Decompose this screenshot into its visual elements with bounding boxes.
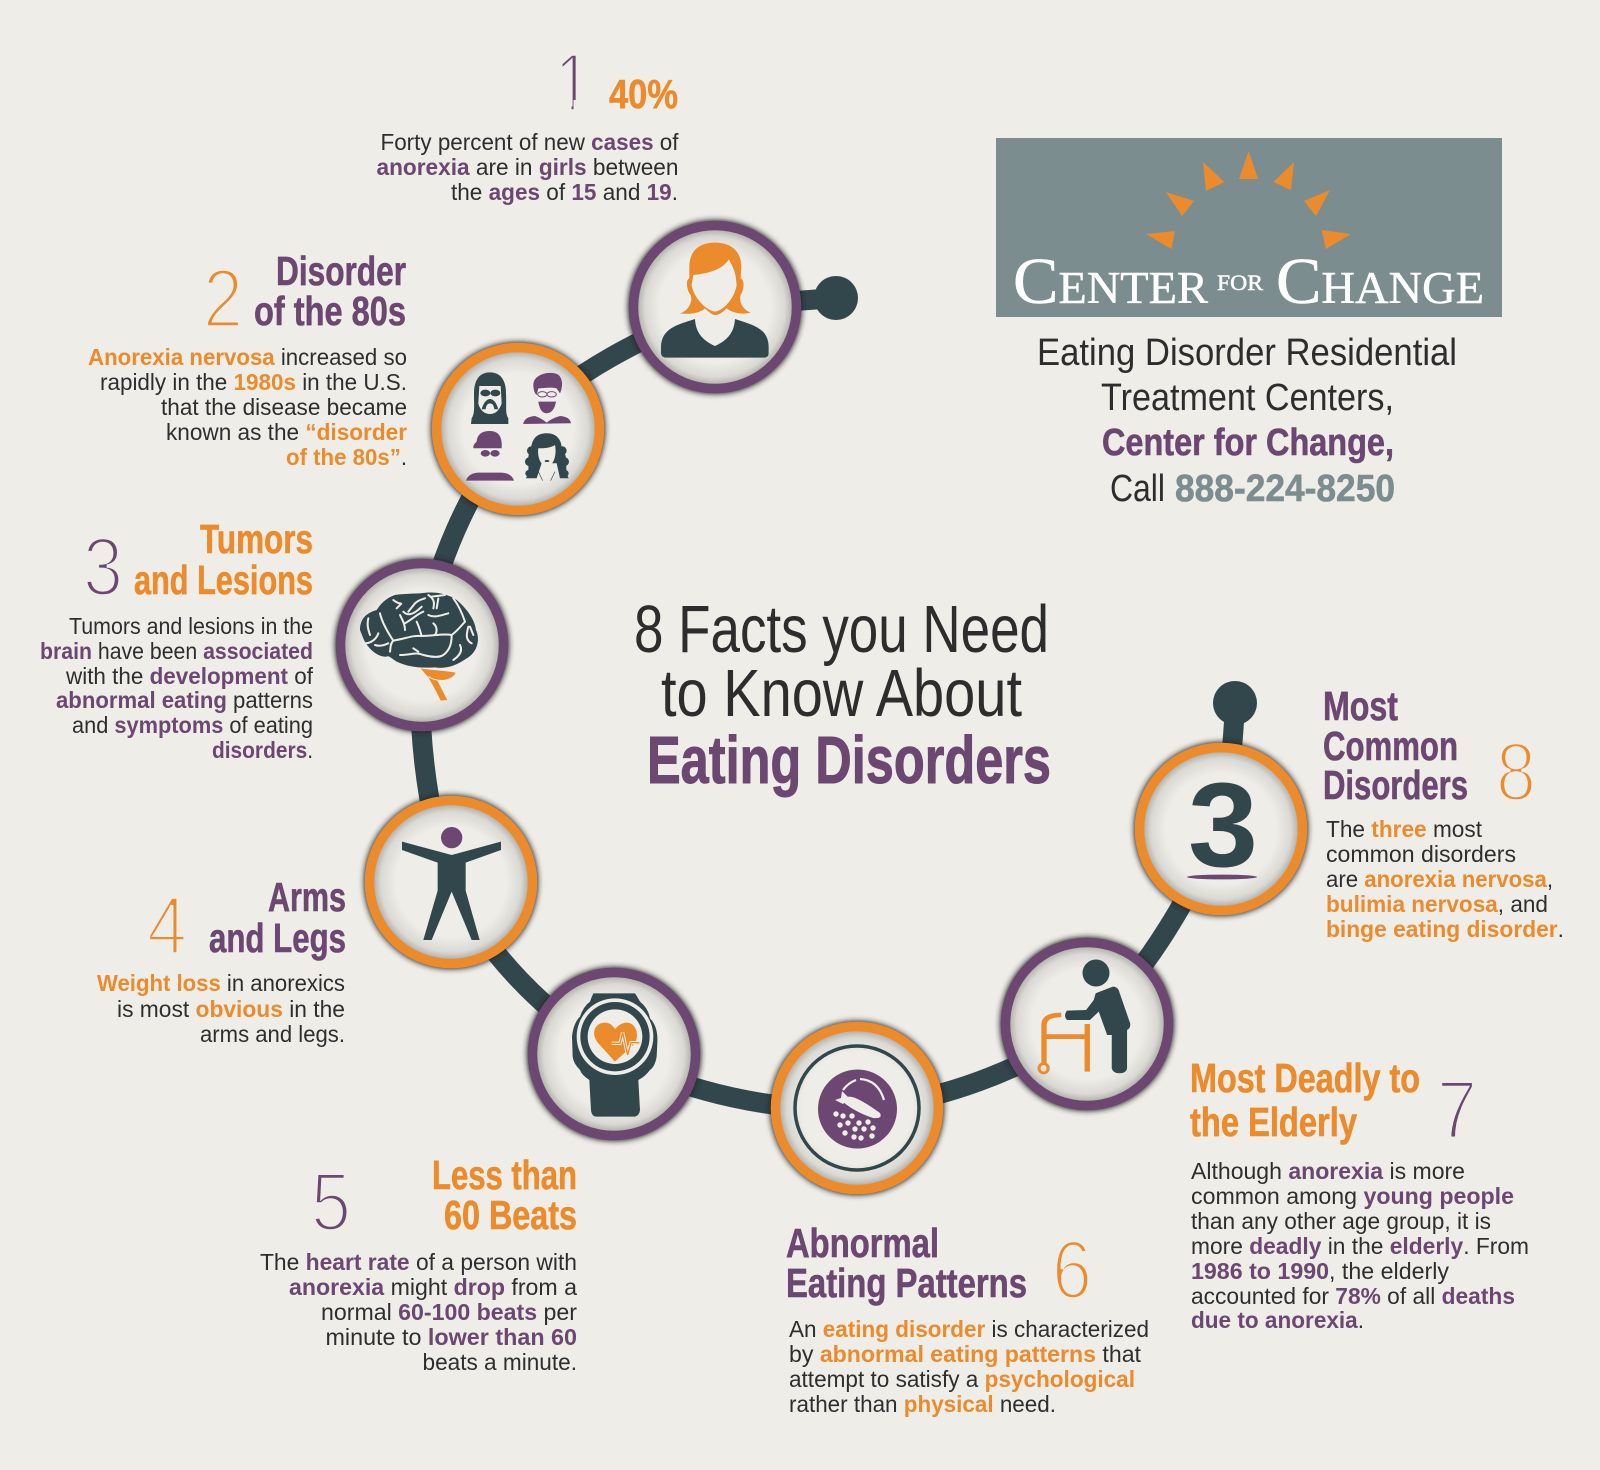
- fact 5: normal 60-100 beats per: [321, 1299, 577, 1325]
- fact 6: An eating disorder is characterized: [789, 1316, 1149, 1342]
- fact 7: due to anorexia.: [1191, 1307, 1364, 1333]
- fact 1: anorexia are in girls between: [376, 154, 678, 180]
- fact 3: Tumors and lesions in the: [69, 613, 313, 639]
- circle 8: number three icon: 3: [1188, 758, 1258, 892]
- fact 2: of the 80s: [254, 288, 406, 334]
- fact 4: Arms: [268, 874, 346, 920]
- fact 8: binge eating disorder.: [1326, 916, 1564, 942]
- fact 4: Weight loss in anorexics: [97, 970, 345, 996]
- fact 2: Anorexia nervosa increased so: [88, 344, 407, 370]
- circle 7: elderly walker icon: [1000, 937, 1174, 1111]
- circle 2: four faces icon: [431, 342, 605, 516]
- fact 3: and symptoms of eating: [72, 712, 313, 738]
- contact text block: 888-224-8250: [1175, 468, 1395, 510]
- fact 7: 7: [1437, 1063, 1477, 1156]
- contact text block: Center for Change,: [1102, 422, 1394, 464]
- fact 8: [1323, 683, 1564, 942]
- circle 5: heart rate watch icon: [527, 967, 701, 1141]
- fact 6: Eating Patterns: [786, 1260, 1027, 1306]
- logo: Center for Change: CENTER: [1013, 245, 1208, 318]
- fact 3: [40, 516, 314, 763]
- fact 5: 5: [311, 1155, 351, 1248]
- fact 5: 60 Beats: [444, 1192, 577, 1238]
- contact text block: [1037, 332, 1457, 510]
- fact 8: Most: [1323, 683, 1398, 729]
- fact 5: minute to lower than 60: [326, 1324, 577, 1350]
- fact 3: 3: [83, 520, 123, 613]
- fact 7: 1986 to 1990, the elderly: [1191, 1258, 1449, 1284]
- fact 7: than any other age group, it is: [1191, 1208, 1491, 1234]
- fact 6: 6: [1052, 1223, 1092, 1316]
- fact 3: and Lesions: [134, 557, 313, 603]
- fact 8: Disorders: [1323, 762, 1468, 808]
- fact 7: Although anorexia is more: [1191, 1158, 1465, 1184]
- fact 1: [376, 36, 679, 205]
- fact 8: bulimia nervosa, and: [1326, 891, 1548, 917]
- fact 6: Abnormal: [786, 1220, 939, 1266]
- fact 3: with the development of: [65, 663, 314, 689]
- contact text block: Treatment Centers,: [1101, 377, 1394, 419]
- fact 8: The three most: [1326, 816, 1483, 842]
- fact 2: [88, 248, 407, 470]
- main title: to Know About: [661, 656, 1022, 731]
- fact 1: 40%: [609, 71, 678, 117]
- fact 3: disorders.: [212, 737, 313, 763]
- fact 2: rapidly in the 1980s in the U.S.: [100, 369, 407, 395]
- fact 8: are anorexia nervosa,: [1326, 866, 1553, 892]
- fact 4: [97, 874, 346, 1047]
- logo: Center for Change: [996, 138, 1502, 318]
- fact 3: brain have been associated: [40, 638, 313, 664]
- fact 7: the Elderly: [1190, 1099, 1357, 1145]
- fact 3: abnormal eating patterns: [56, 687, 313, 713]
- fact 7: Most Deadly to: [1190, 1055, 1420, 1101]
- circle 1: woman icon: [628, 220, 802, 394]
- fact 6: [786, 1220, 1149, 1417]
- fact 8: Common: [1323, 723, 1458, 769]
- fact 5: [260, 1152, 577, 1375]
- fact 6: by abnormal eating patterns that: [789, 1341, 1142, 1367]
- fact 7: [1190, 1055, 1529, 1333]
- main title: Eating Disorders: [647, 723, 1051, 798]
- circle 8: number three icon: [1134, 742, 1308, 916]
- fact 4: arms and legs.: [200, 1021, 345, 1047]
- fact 7: common among young people: [1191, 1183, 1514, 1209]
- circle 4: human figure icon: [364, 795, 538, 969]
- fact 2: that the disease became: [161, 394, 407, 420]
- logo: Center for Change: FOR: [1217, 270, 1263, 295]
- fact 2: of the 80s”.: [286, 444, 407, 470]
- fact 1: 1: [555, 36, 591, 129]
- logo: Center for Change: CHANGE: [1276, 245, 1484, 318]
- logo sun rays: [1146, 151, 1351, 249]
- fact 8: common disorders: [1326, 841, 1516, 867]
- circle 6: food grater icon: [770, 1021, 944, 1195]
- main title: 8 Facts you Need: [634, 592, 1049, 667]
- fact 8: 8: [1496, 725, 1536, 818]
- circle 3: brain icon: [335, 558, 509, 732]
- timeline path: [420, 276, 1257, 1109]
- fact 5: Less than: [432, 1152, 577, 1198]
- fact 2: 2: [203, 252, 243, 345]
- fact 5: beats a minute.: [422, 1349, 577, 1375]
- fact 5: The heart rate of a person with: [260, 1249, 577, 1275]
- fact 6: rather than physical need.: [789, 1391, 1056, 1417]
- fact 7: more deadly in the elderly. From: [1191, 1233, 1529, 1259]
- fact 6: attempt to satisfy a psychological: [789, 1366, 1135, 1392]
- fact 5: anorexia might drop from a: [289, 1274, 577, 1300]
- fact 3: Tumors: [200, 516, 313, 562]
- fact 2: Disorder: [276, 248, 406, 294]
- fact 1: the ages of 15 and 19.: [451, 179, 678, 205]
- fact 2: known as the “disorder: [166, 419, 407, 445]
- contact text block: Eating Disorder Residential: [1037, 332, 1457, 374]
- fact 7: accounted for 78% of all deaths: [1191, 1283, 1515, 1309]
- fact 4: and Legs: [209, 915, 346, 961]
- fact 1: Forty percent of new cases of: [380, 129, 679, 155]
- main title: [634, 592, 1051, 798]
- fact 4: 4: [147, 879, 187, 972]
- contact text block: Call: [1110, 468, 1165, 510]
- fact 4: is most obvious in the: [117, 996, 345, 1022]
